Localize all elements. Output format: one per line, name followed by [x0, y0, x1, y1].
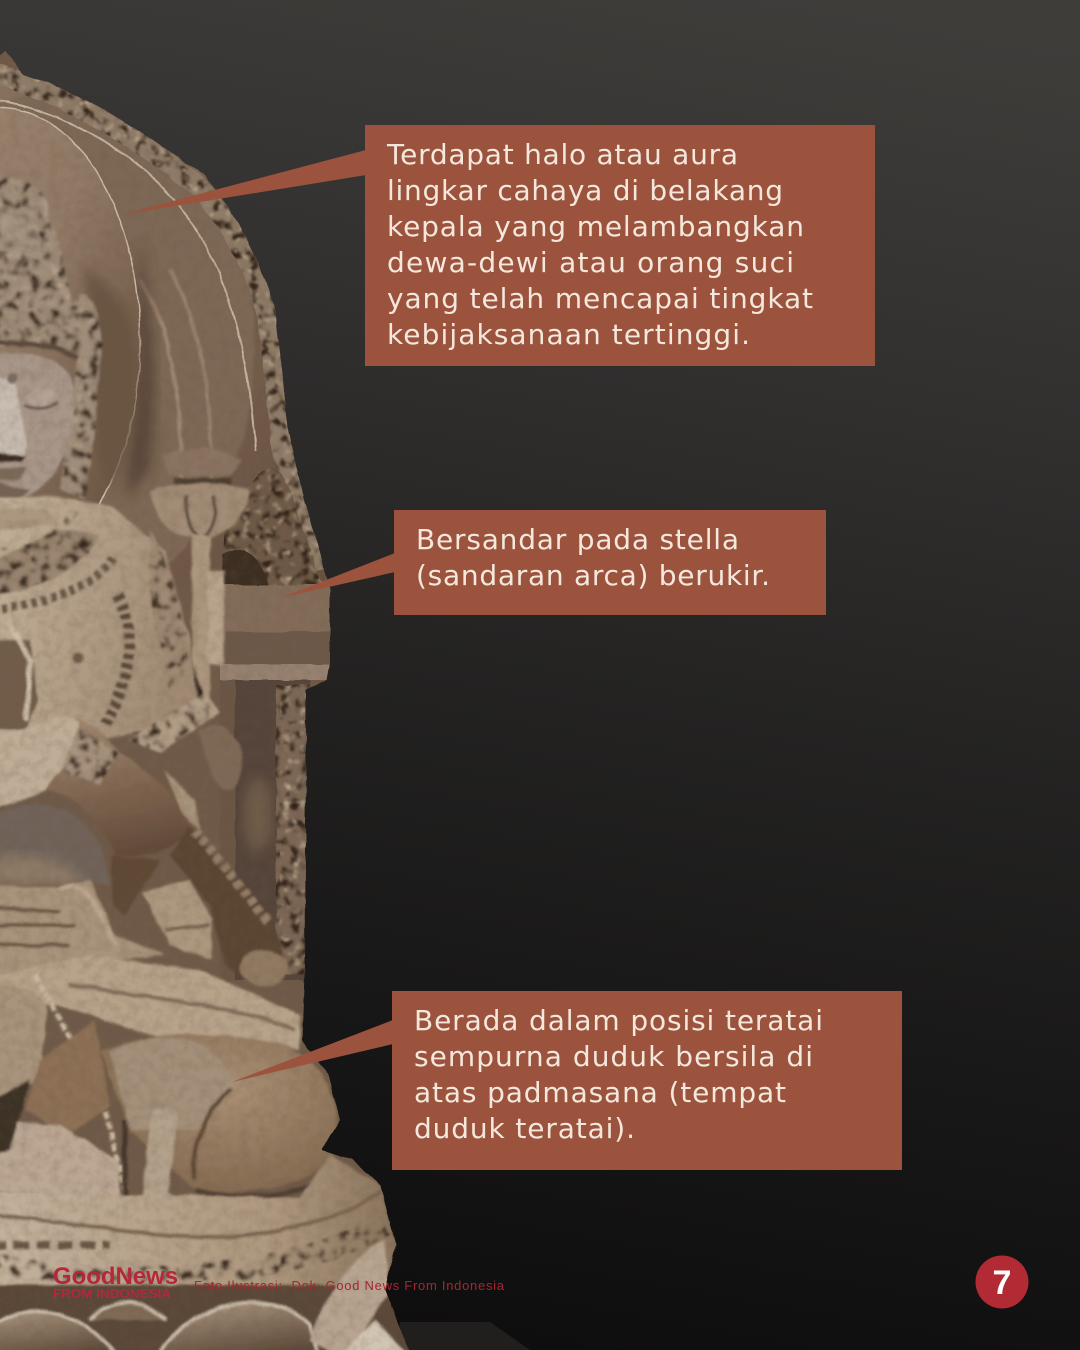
pedestal back slab: [224, 584, 330, 632]
pointer 2: [280, 553, 395, 598]
lotus petals: [0, 1240, 420, 1350]
callout box 2: [394, 510, 826, 615]
logo: GoodNews From Indonesia: FROM INDONESIA: [53, 1286, 172, 1301]
crossed legs: [0, 955, 300, 1200]
callout text 3: Berada dalam posisi teratai: [414, 1004, 823, 1037]
sash and waist: [0, 880, 212, 975]
dark recess behind arm: [132, 664, 204, 735]
callout text 2: Bersandar pada stella: [416, 523, 739, 556]
stone texture: [0, 94, 400, 1350]
callout 3: padmasana: [232, 991, 902, 1170]
pointer 3: [232, 1020, 393, 1082]
callout text 2: [416, 523, 770, 592]
statue photo illustration: [0, 0, 420, 1350]
callout text 1: lingkar cahaya di belakang: [387, 174, 783, 207]
callout text 2: (sandaran arca) berukir.: [416, 559, 770, 592]
torso and jewellery: [0, 497, 200, 760]
page number badge: 7: [993, 1264, 1011, 1302]
callout text 3: duduk teratai).: [414, 1112, 635, 1145]
callout box 1: [365, 125, 875, 366]
callout text 3: sempurna duduk bersila di: [414, 1040, 813, 1073]
callout 2: stella: [280, 510, 826, 615]
pointer 1: [120, 150, 366, 215]
arms and hands: [0, 692, 288, 986]
face: [0, 353, 74, 500]
photo credit: Foto Ilustrasi:. Dok. Good News From Indonesia: [194, 1278, 505, 1293]
ornate flame border: [0, 72, 318, 570]
page number badge: [976, 1256, 1028, 1308]
knee with textured sarong: [100, 1032, 338, 1198]
callout box 3: [392, 991, 902, 1170]
belly: [0, 804, 160, 915]
logo: GoodNews From Indonesia: GoodNews: [53, 1263, 178, 1290]
lower right scroll ornament: [222, 470, 322, 585]
callout text 1: kepala yang melambangkan: [387, 210, 804, 243]
callout text 1: dewa-dewi atau orang suci: [387, 246, 794, 279]
callout text 1: [386, 138, 813, 351]
lotus flower and stem: [150, 446, 250, 705]
crown: [0, 178, 102, 500]
callout text 3: atas padmasana (tempat: [414, 1076, 786, 1109]
halo disc: [0, 106, 142, 506]
floor shadow: [395, 1322, 530, 1350]
callout text 1: kebijaksanaan tertinggi.: [387, 318, 750, 351]
carved column: [276, 685, 310, 975]
callout 1: halo: [120, 125, 875, 366]
callout text 1: Terdapat halo atau aura: [386, 138, 738, 171]
stele outer band: [0, 85, 326, 581]
callout text 1: yang telah mencapai tingkat: [387, 282, 813, 315]
lotus cushion padmasana: [0, 1155, 396, 1290]
callout text 3: [414, 1004, 823, 1145]
